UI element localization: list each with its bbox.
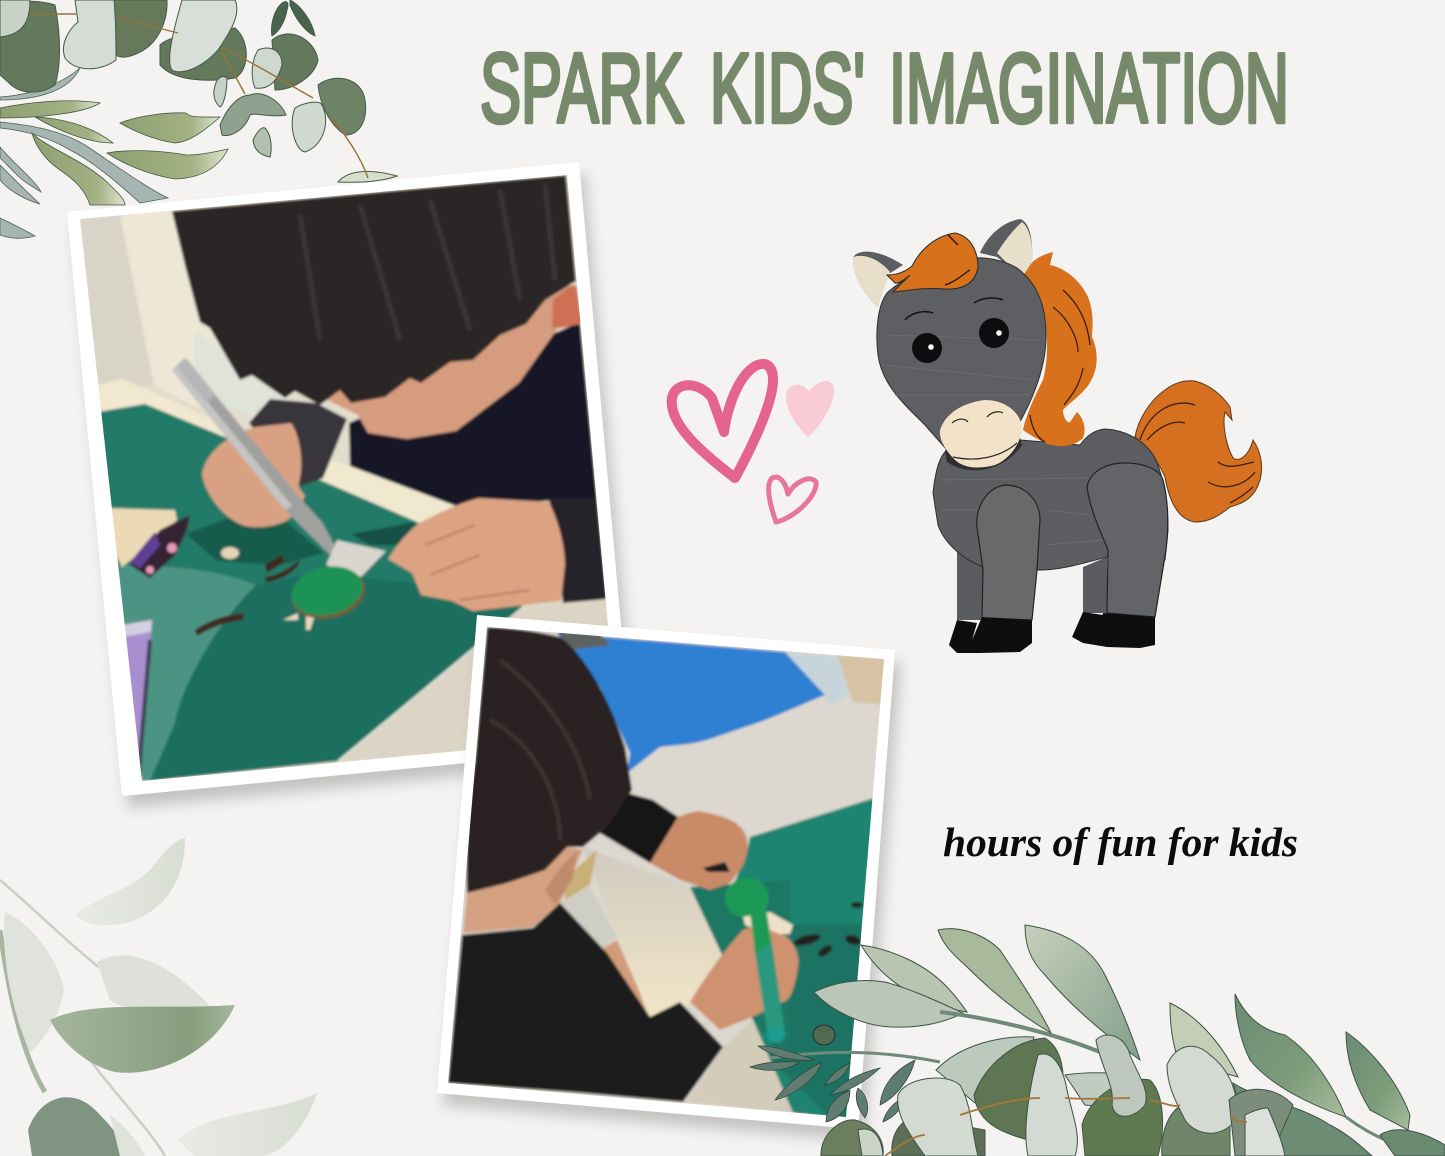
icon: hearts [672,364,831,522]
face [463,847,583,933]
hair [467,627,632,893]
tagline: hours of fun for kids [943,819,1298,865]
silver marker [172,358,336,555]
table corner [338,596,620,761]
photo: boy colouring with silver marker [67,162,632,796]
pony forelock [887,233,978,292]
title [480,33,1289,143]
photo: boy colouring with green marker [437,615,895,1130]
black sweater [349,322,597,506]
craft pieces [107,508,177,567]
purple pen [126,630,153,760]
foliage: bottom-right garland [750,925,1445,1156]
craft piece [725,878,769,918]
wall [80,215,154,390]
pony brows [905,298,1003,320]
pony eyes [912,333,942,363]
illustration: wooden pony [853,219,1262,653]
face [309,285,580,439]
left hand [202,423,305,527]
title: KIDS' [710,33,865,143]
pony tail [1135,381,1262,522]
left sleeve [249,399,347,486]
pony muzzle [945,430,1022,470]
blue felt [557,633,825,773]
upper hand [650,811,748,890]
cutting mat [101,402,522,723]
hair [172,175,576,405]
green marker [750,908,785,1043]
lower hand [690,923,798,1030]
table [96,379,460,525]
right hand [388,498,565,611]
pony mane [1022,252,1097,446]
table panels [583,847,723,1017]
black sweater [448,903,723,1102]
pony near legs [977,485,1040,620]
title: SPARK [480,33,684,143]
pony ears [853,252,903,307]
green mat [734,796,872,1117]
pony hooves [949,612,1155,653]
foliage: top-left eucalyptus [0,0,397,238]
pony body [933,429,1168,570]
pony far legs [957,550,1107,620]
foliage: bottom-left leaves [0,838,317,1156]
pony head [877,258,1046,450]
